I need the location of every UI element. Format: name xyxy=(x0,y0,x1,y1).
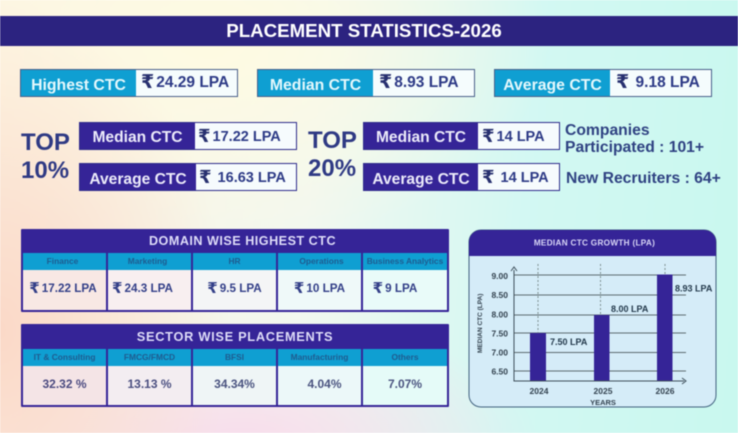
x axis labels: 2024 xyxy=(530,386,549,396)
column: others xyxy=(363,349,447,366)
stat: highest CTC: Highest CTC xyxy=(31,77,126,94)
column: operations xyxy=(278,253,361,270)
value: business analytics: ₹9 LPA xyxy=(373,280,417,297)
column: HR: HR xyxy=(228,256,241,266)
x axis labels: 2026 xyxy=(656,386,675,396)
column: IT and consulting: IT & Consulting xyxy=(34,352,95,362)
top 20 median CTC: ₹14 LPA xyxy=(482,126,545,146)
stat: median CTC: ₹8.93 LPA xyxy=(379,72,459,93)
bar value labels: 7.50 LPA xyxy=(550,337,588,347)
axes xyxy=(511,267,686,384)
y axis title: MEDIAN CTC (LPA) xyxy=(477,294,484,353)
value: FMCG xyxy=(108,366,191,405)
column: BFSI xyxy=(193,349,276,366)
heading: top 20% xyxy=(308,127,357,182)
stat: highest CTC xyxy=(20,69,238,97)
y axis tick labels: 6.50 xyxy=(491,366,508,376)
chart panel xyxy=(469,230,716,407)
top 20 median CTC xyxy=(363,122,560,150)
value: manufacturing: 4.04% xyxy=(307,377,342,391)
x axis labels xyxy=(530,386,675,396)
y axis tick labels: 7.00 xyxy=(491,348,508,358)
value: finance xyxy=(23,270,106,310)
value: HR: ₹9.5 LPA xyxy=(207,280,262,297)
companies participated: Participated : 101+ xyxy=(565,139,704,156)
column: business analytics xyxy=(363,253,447,270)
heading: top 20%: 20% xyxy=(308,155,356,182)
stat: average CTC xyxy=(494,69,712,97)
table heading: SECTOR WISE PLACEMENTS xyxy=(137,329,333,344)
top 10 average CTC: Average CTC xyxy=(89,171,187,188)
column: operations: Operations xyxy=(299,256,344,266)
title banner: PLACEMENT STATISTICS-2026 xyxy=(226,20,502,41)
value: HR xyxy=(193,270,276,310)
top 10 median CTC xyxy=(79,122,297,150)
y axis tick labels: 8.00 xyxy=(491,310,508,320)
column: IT and consulting xyxy=(23,349,106,366)
top 10 median CTC: ₹17.22 LPA xyxy=(198,126,281,146)
stat: median CTC xyxy=(257,69,475,97)
column: marketing xyxy=(108,253,191,270)
value: business analytics xyxy=(363,270,447,310)
column: others: Others xyxy=(392,352,418,362)
new recruiters: New Recruiters : 64+ xyxy=(566,170,721,187)
heading: top 10% xyxy=(20,129,70,184)
value: finance: ₹17.22 LPA xyxy=(29,280,97,297)
value: operations xyxy=(278,270,361,310)
value: IT and consulting xyxy=(23,366,106,405)
top 20 average CTC: Average CTC xyxy=(372,171,470,188)
column: finance xyxy=(23,253,106,270)
column: BFSI: BFSI xyxy=(225,352,244,362)
title banner xyxy=(0,16,738,46)
top 10 average CTC xyxy=(79,163,297,191)
top 10 median CTC: Median CTC xyxy=(92,129,183,146)
column: marketing: Marketing xyxy=(128,256,167,266)
column: FMCG xyxy=(108,349,191,366)
stat: highest CTC: ₹24.29 LPA xyxy=(141,72,229,93)
y axis tick labels: 8.50 xyxy=(491,290,508,300)
column: business analytics: Business Analytics xyxy=(367,256,443,266)
y axis tick labels xyxy=(491,271,508,376)
value: FMCG: 13.13 % xyxy=(127,377,172,391)
value: others: 7.07% xyxy=(388,377,422,391)
value: BFSI: 34.34% xyxy=(214,377,255,391)
value: manufacturing xyxy=(278,366,361,405)
value: marketing xyxy=(108,270,191,310)
y axis tick labels: 9.00 xyxy=(491,271,508,281)
heading: top 10%: TOP xyxy=(21,129,70,156)
table: domain wise highest CTC xyxy=(21,229,449,312)
column: manufacturing xyxy=(278,349,361,366)
stat: median CTC: Median CTC xyxy=(270,77,361,94)
stat: average CTC: ₹ 9.18 LPA xyxy=(616,72,700,93)
table: sector wise placements xyxy=(21,324,449,407)
value: IT and consulting: 32.32 % xyxy=(42,377,87,391)
grid lines xyxy=(514,264,686,371)
value: marketing: ₹24.3 LPA xyxy=(112,280,173,297)
top 20 median CTC: Median CTC xyxy=(376,129,466,146)
top 20 average CTC xyxy=(363,163,560,191)
x axis title: YEARS xyxy=(590,398,616,407)
table heading: DOMAIN WISE HIGHEST CTC xyxy=(149,234,336,248)
column: FMCG: FMCG/FMCD xyxy=(124,352,175,362)
value: operations: ₹10 LPA xyxy=(294,280,345,297)
bar value labels: 8.93 LPA xyxy=(675,284,713,294)
value: BFSI xyxy=(193,366,276,405)
heading: top 20%: TOP xyxy=(308,127,357,154)
companies participated xyxy=(564,122,704,156)
bars xyxy=(530,274,672,380)
bar value labels: 8.00 LPA xyxy=(611,304,649,314)
companies participated: Companies xyxy=(565,122,650,139)
y axis tick labels: 7.50 xyxy=(491,328,508,338)
top 20 average CTC: ₹ 14 LPA xyxy=(482,167,549,187)
column: manufacturing: Manufacturing xyxy=(291,352,348,362)
top 10 average CTC: ₹ 16.63 LPA xyxy=(199,167,286,187)
heading: top 10%: 10% xyxy=(21,157,69,184)
column: HR xyxy=(193,253,276,270)
stat: average CTC: Average CTC xyxy=(503,77,602,94)
value: others xyxy=(363,366,447,405)
bar value labels xyxy=(550,284,713,347)
x axis labels: 2025 xyxy=(594,386,613,396)
chart title: MEDIAN CTC GROWTH (LPA) xyxy=(534,238,655,248)
column: finance: Finance xyxy=(47,256,78,266)
